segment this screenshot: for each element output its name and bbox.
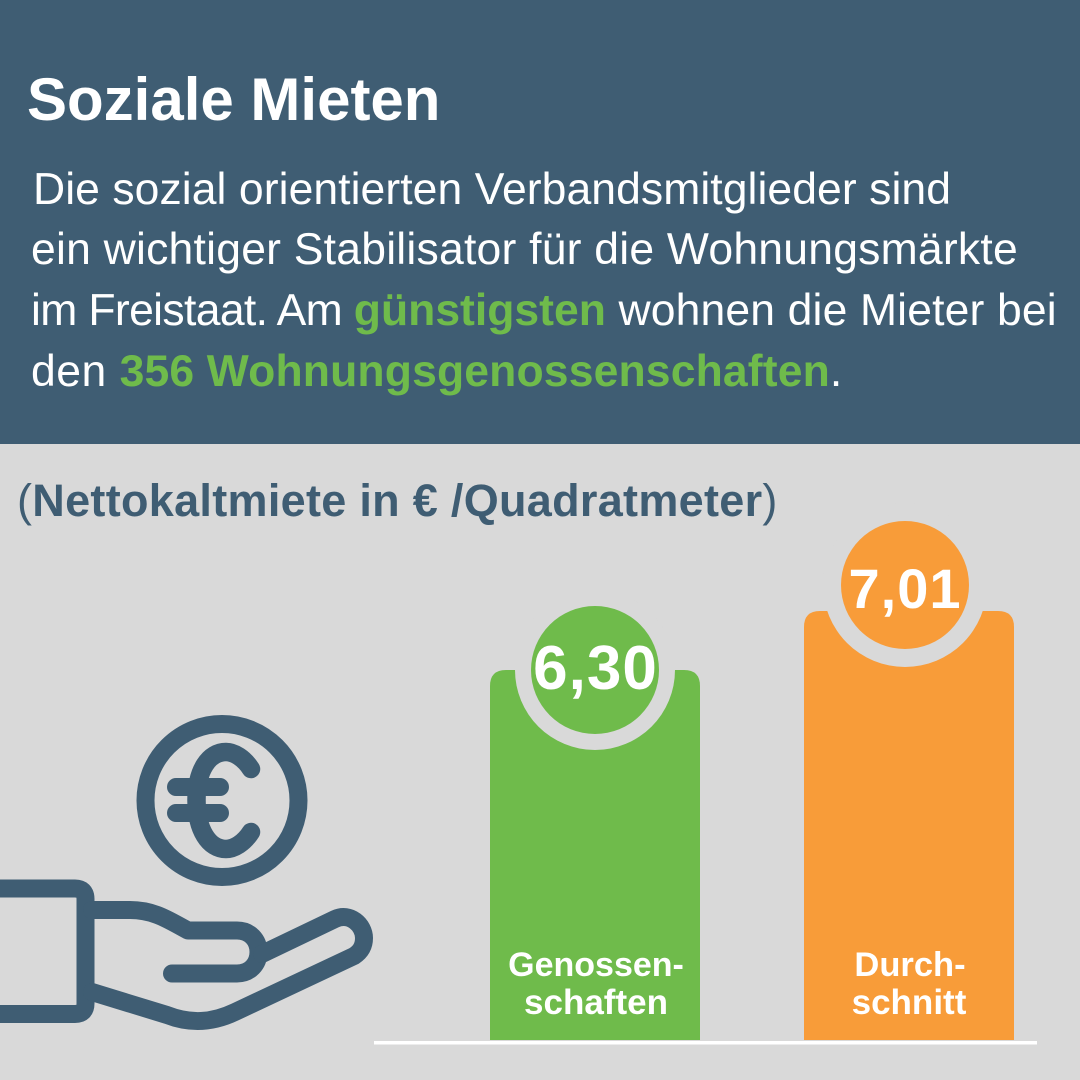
intro text: ein wichtiger Stabilisator für die Wohnungsmärkte [31, 225, 1018, 274]
label: Genossenschaften [508, 946, 684, 1022]
icon: euro coin [146, 724, 298, 877]
label: Durchschnitt: Durch- [854, 946, 966, 984]
value: 6,30: 6,30 [533, 634, 658, 703]
icon: hand holding euro coin [0, 724, 364, 1021]
label: Genossenschaften: Genossen- [508, 946, 684, 984]
intro text: Die sozial orientierten Verbandsmitglieder sind [33, 165, 951, 214]
bar: Durchschnitt [804, 503, 1014, 1040]
title: Soziale Mieten [27, 66, 440, 133]
header panel [0, 0, 1080, 444]
icon: hand [0, 888, 364, 1021]
chart subtitle: (Nettokaltmiete in € /Quadratmeter) [17, 474, 778, 526]
intro text: den 356 Wohnungsgenossenschaften. [31, 347, 842, 396]
label: Durchschnitt: schnitt [852, 983, 967, 1022]
intro text: im Freistaat. Am günstigsten wohnen die Mieter bei [31, 286, 1057, 335]
intro text [31, 165, 1057, 396]
value: 7,01: 7,01 [848, 557, 962, 620]
label: Durchschnitt [852, 946, 967, 1022]
bar: Genossenschaften [490, 590, 700, 1040]
label: Genossenschaften: schaften [524, 983, 668, 1022]
